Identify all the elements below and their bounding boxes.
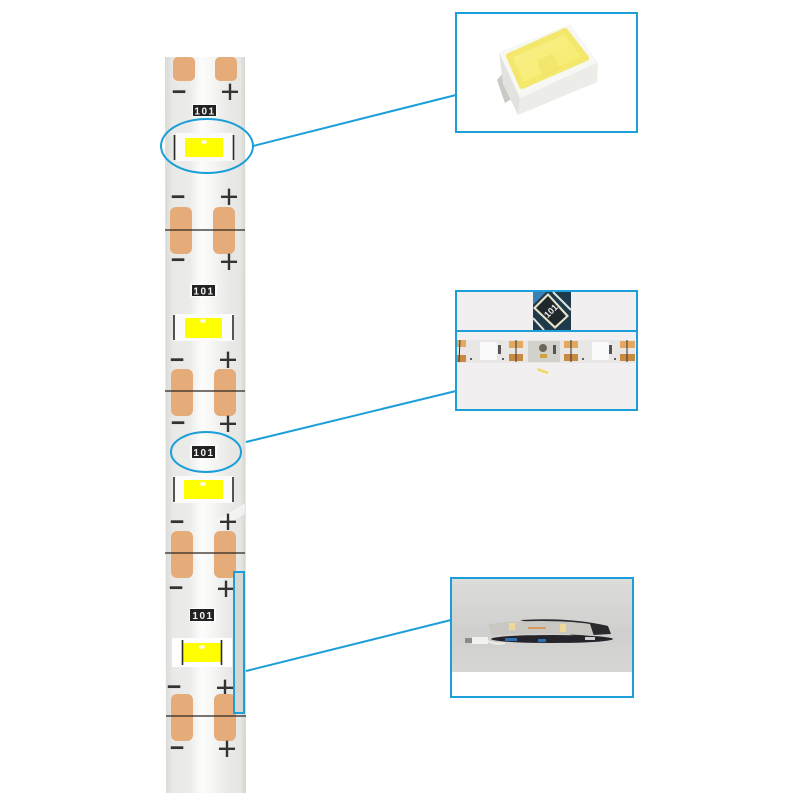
cut line pads 3: − [169,574,183,602]
segment 1: resistor 101 [192,104,217,118]
segment 1: top pads and polarity marks: − [172,78,186,106]
cut line pads 4: + [217,730,237,767]
segment 2: lower polarity marks: − [170,346,184,374]
connector cable [465,637,505,644]
resistor photo [533,292,571,331]
segment 2: lower polarity marks: + [218,341,238,378]
callout ellipse: resistor [171,432,241,472]
resistor photo: 101 [542,302,560,320]
segment 4: LED chip [172,638,232,667]
divider line [456,330,637,332]
cut line pads 3: + [216,570,236,607]
icon: LED package [497,24,598,115]
connector line: LED chip [253,95,456,146]
panel: resistor close-up [456,291,637,410]
segment 3: lower polarity marks: + [218,503,238,540]
segment 2: resistor 101: 101 [193,286,215,298]
cut line pads 4: − [170,734,184,762]
cut line pads 2: + [218,405,238,442]
segment 4: lower polarity marks: − [167,673,181,701]
panel: strip reel photo [451,578,633,697]
segment 3: lower polarity marks [170,503,238,540]
segment 2: resistor 101 [190,284,217,298]
segment 1: top pads and polarity marks: + [220,73,240,110]
cut line pads 2: − [171,409,185,437]
segment 4: resistor 101: 101 [192,611,214,622]
segment 4: lower polarity marks: + [215,669,235,706]
segment 3: lower polarity marks: − [170,508,184,536]
segment 2: LED chip [174,314,234,341]
segment 3: LED chip [173,476,233,503]
segment 1: lower polarity marks [171,178,239,215]
segment 1: top pads and polarity marks [172,57,240,110]
small LED chip [536,367,551,377]
photo background [452,579,632,672]
cut line pads 4 [166,694,246,767]
segment 4: resistor 101 [189,608,216,622]
callout rectangle: strip thickness [234,572,244,713]
reel [465,619,613,644]
cut line pads 2 [165,369,245,442]
cut line pads 1: − [171,246,185,274]
segment 1: lower polarity marks: − [171,183,185,211]
cut line pads 3 [165,531,245,607]
panel: LED close-up [456,13,637,132]
segment 4: lower polarity marks [167,669,235,706]
LED strip [165,57,246,793]
LED strip photo [457,340,635,363]
segment 3: resistor 101 [190,445,217,459]
connector line: resistor [246,391,456,442]
cut line pads 1 [165,207,245,280]
segment 3: resistor 101: 101 [193,448,215,459]
segment 1: LED chip [174,133,234,161]
cut line pads 1: + [219,243,239,280]
segment 2: lower polarity marks [170,341,238,378]
segment 1: resistor 101: 101 [194,106,216,118]
connector line: strip thickness [246,620,451,671]
segment 1: lower polarity marks: + [219,178,239,215]
callout ellipse: LED chip [161,119,253,173]
